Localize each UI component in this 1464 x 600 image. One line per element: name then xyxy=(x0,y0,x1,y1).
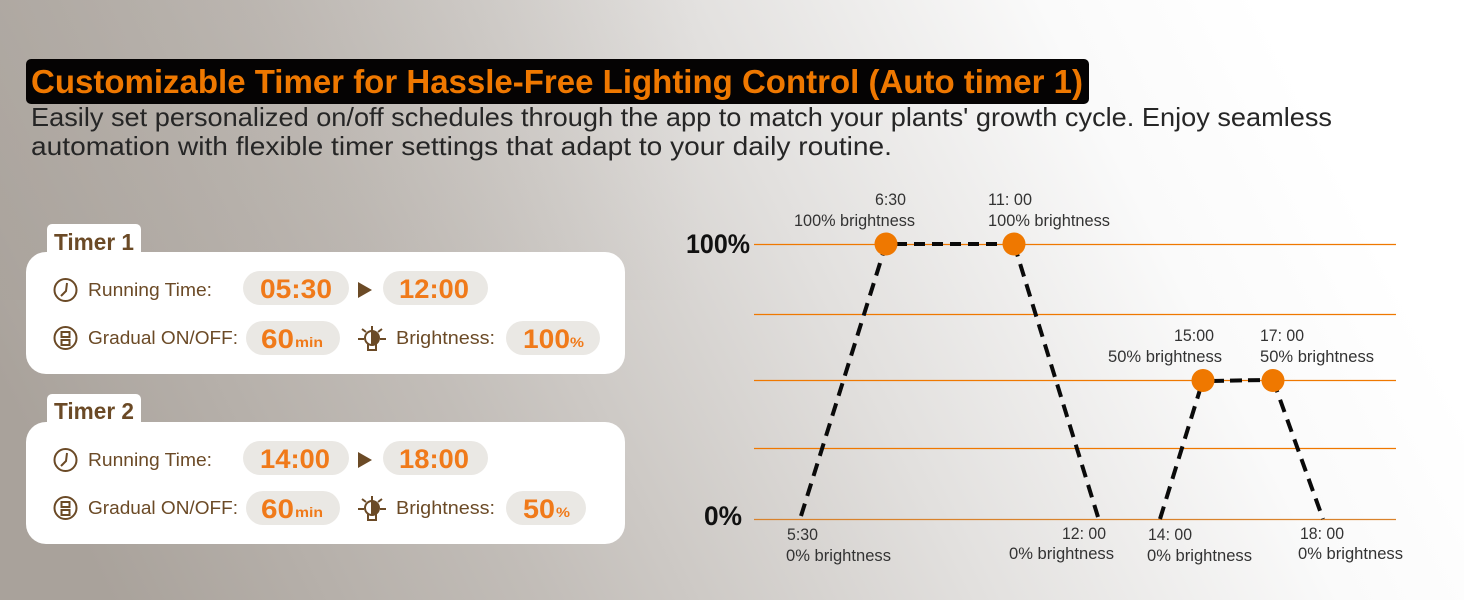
start time pill xyxy=(243,271,349,305)
description text xyxy=(31,102,1332,161)
title: Customizable Timer for Hassle-Free Lighting Control (Auto timer 1) xyxy=(31,63,1083,100)
point labels: 11: 00 xyxy=(988,190,1032,209)
start time pill: 14:00 xyxy=(260,444,330,474)
point labels: 15:00 xyxy=(1174,326,1214,345)
timer 1 tab xyxy=(47,224,141,264)
timer 2 tab: Timer 2 xyxy=(54,398,134,424)
brightness pill: % xyxy=(556,504,571,520)
brightness pill xyxy=(506,321,600,355)
icon: clock xyxy=(54,449,76,471)
y axis labels: 100% xyxy=(686,229,750,259)
start time pill xyxy=(243,441,349,475)
arrow xyxy=(358,282,372,298)
y axis labels: 0% xyxy=(704,501,742,531)
panel: timer 1 xyxy=(26,224,625,374)
icon: hourglass xyxy=(54,497,76,519)
icon: bulb xyxy=(358,496,386,520)
point labels: 0% brightness xyxy=(1009,544,1114,563)
chart: brightness schedule xyxy=(686,190,1403,565)
description text: Easily set personalized on/off schedules through the app to match your plants' growth cycle. Enjoy seamless xyxy=(31,102,1332,132)
point labels: 17: 00 xyxy=(1260,326,1304,345)
gradual label: Gradual ON/OFF: xyxy=(88,498,238,518)
brightness pill: 50 xyxy=(523,494,555,524)
brightness label: Brightness: xyxy=(396,498,495,518)
timer 2 tab xyxy=(47,394,141,434)
brightness pill: 100 xyxy=(523,324,570,354)
brightness pill xyxy=(506,491,586,525)
end time pill: 18:00 xyxy=(399,444,469,474)
start time pill: 05:30 xyxy=(260,274,332,304)
end time pill xyxy=(383,271,488,305)
running time label: Running Time: xyxy=(88,450,212,470)
point labels: 18: 00 xyxy=(1300,524,1344,543)
point labels: 100% brightness xyxy=(988,211,1110,230)
timer 1 tab: Timer 1 xyxy=(54,229,134,255)
point labels: 14: 00 xyxy=(1148,525,1192,544)
gradual label: Gradual ON/OFF: xyxy=(88,328,238,348)
icon: clock xyxy=(54,279,76,301)
gradual pill: min xyxy=(295,504,323,520)
running time label: Running Time: xyxy=(88,280,212,300)
point labels: 0% brightness xyxy=(786,546,891,565)
point labels: 50% brightness xyxy=(1108,347,1222,366)
arrow xyxy=(358,452,372,468)
brightness label: Brightness: xyxy=(396,328,495,348)
data points xyxy=(874,232,1284,392)
point labels xyxy=(786,190,1403,565)
gradual pill xyxy=(246,321,340,355)
icon: hourglass xyxy=(54,327,76,349)
point labels: 6:30 xyxy=(875,190,906,209)
brightness pill: % xyxy=(570,334,585,350)
gradual pill xyxy=(246,491,340,525)
point labels: 0% brightness xyxy=(1147,546,1252,565)
end time pill xyxy=(383,441,488,475)
point labels: 12: 00 xyxy=(1062,524,1106,543)
point labels: 0% brightness xyxy=(1298,544,1403,563)
grid lines xyxy=(754,244,1396,520)
point labels: 50% brightness xyxy=(1260,347,1374,366)
description text: automation with flexible timer settings that adapt to your daily routine. xyxy=(31,131,892,161)
point labels: 5:30 xyxy=(787,525,818,544)
end time pill: 12:00 xyxy=(399,274,469,304)
dashed brightness curve xyxy=(801,244,1323,519)
gradual pill: min xyxy=(295,334,323,350)
gradual pill: 60 xyxy=(261,324,294,354)
y axis labels xyxy=(686,229,750,531)
point labels: 100% brightness xyxy=(794,211,915,230)
panel: timer 2 xyxy=(26,394,625,544)
gradual pill: 60 xyxy=(261,494,294,524)
icon: bulb xyxy=(358,326,386,350)
